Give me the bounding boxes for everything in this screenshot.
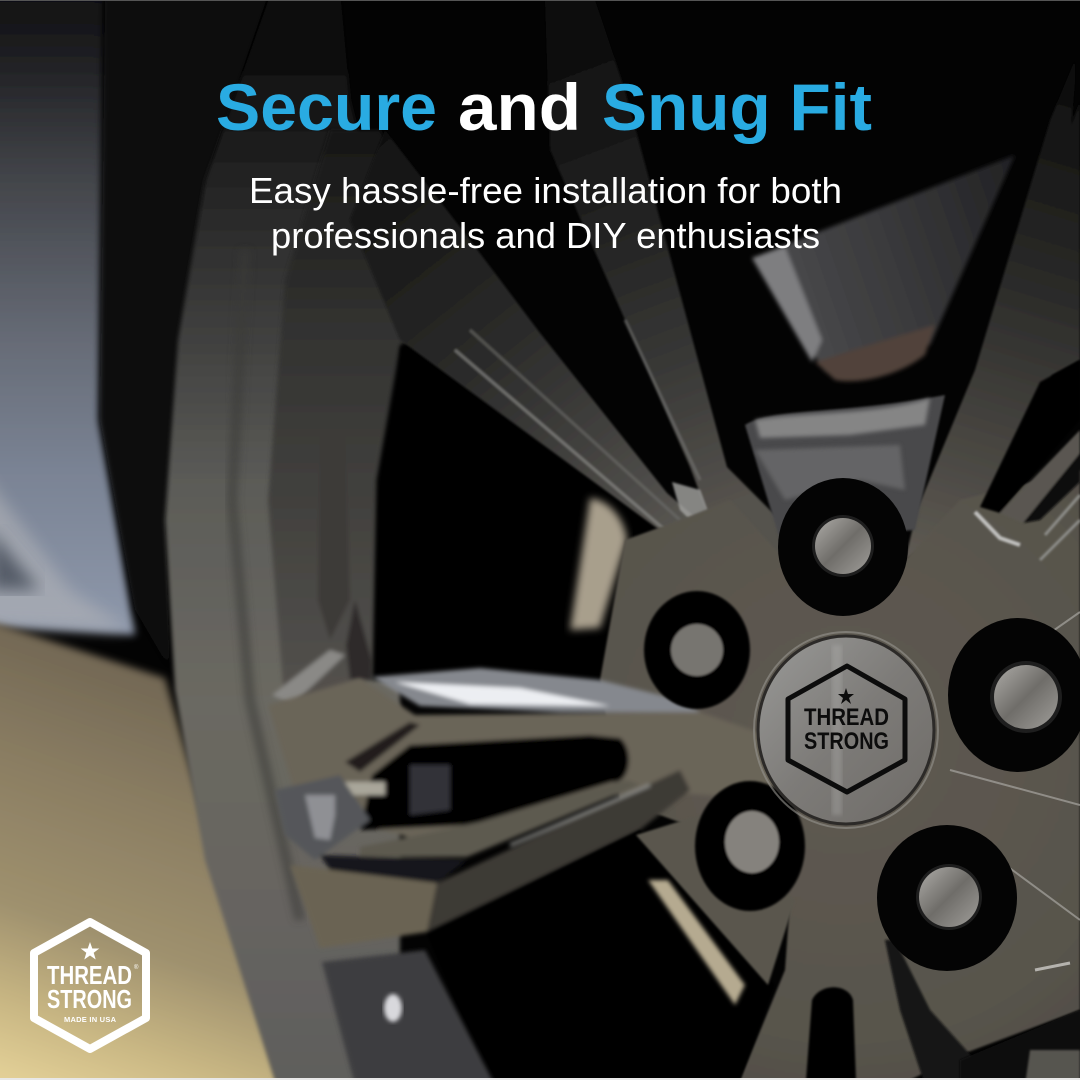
ground [0, 618, 285, 1080]
badge hexagon [34, 922, 146, 1049]
inner wheel darkness [372, 345, 690, 690]
brand logo badge: ® [134, 964, 139, 971]
lug holes and nuts [644, 478, 1080, 971]
lug nut right [948, 618, 1080, 772]
brand logo badge: MADE IN USA [64, 1015, 117, 1024]
subtitle: Easy hassle-free installation for both [249, 170, 842, 211]
lug nut lower right [877, 825, 1017, 971]
bottom slots [806, 987, 856, 1080]
badge wordmark: THREAD [47, 960, 132, 990]
wheel barrel [268, 130, 470, 710]
cap logo wordmark: THREAD [804, 704, 889, 731]
center cap with logo: STRONG [804, 728, 889, 755]
cap logo star [838, 688, 854, 704]
subtitle: professionals and DIY enthusiasts [271, 215, 820, 256]
title: Secure [216, 70, 437, 144]
spokes [268, 0, 1080, 1080]
tire shading arcs [232, 250, 300, 920]
brand logo badge: STRONG [47, 984, 132, 1014]
lower dark window [427, 830, 775, 1080]
badge star [81, 942, 99, 960]
subtitle [249, 170, 842, 256]
upper left spoke B [545, 0, 800, 600]
lug nut top [778, 478, 908, 616]
lower wedge spoke [636, 815, 795, 985]
lug block [745, 395, 945, 540]
hub body [600, 470, 1080, 1080]
inner disc glow [570, 498, 627, 630]
title: Snug Fit [602, 70, 872, 144]
top right slots [975, 360, 1080, 560]
wheel arch shadow [100, 0, 270, 670]
beige reflection strip [648, 880, 745, 1005]
spoke: left [268, 668, 780, 948]
title [216, 70, 872, 144]
lug nut left [644, 591, 750, 709]
car body panel [0, 0, 135, 635]
cap logo hexagon [788, 666, 905, 792]
tire [165, 0, 400, 1080]
bottom barrel [322, 950, 495, 1080]
brake disc behind spokes [752, 155, 1015, 381]
upper left spoke A [350, 130, 710, 545]
center cap with logo [754, 632, 938, 828]
top right spokes [905, 60, 1080, 560]
lug nut lower left [695, 781, 805, 911]
brand logo badge [34, 922, 146, 1049]
title: and [458, 70, 581, 144]
